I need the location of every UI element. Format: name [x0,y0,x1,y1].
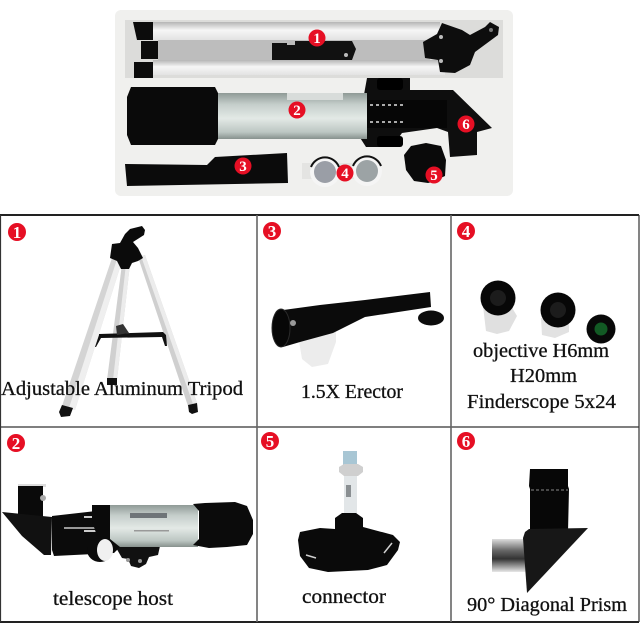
erector illustration [272,292,444,367]
label: eyepiece specs [467,340,616,413]
number badge 4: 4 [462,222,471,241]
label: erector: 1.5X Erector [301,381,403,403]
tray number badges: 1 [313,31,321,47]
erector tube in tray [125,153,288,186]
number badge 1 [8,223,26,242]
number badge 6 [457,432,475,451]
tray number badges: 2 [293,103,301,119]
foam tray base [115,10,513,196]
number badge 3: 3 [268,222,276,241]
panel: connector [261,432,400,608]
number badge 4 [457,222,475,241]
panel: erector [263,222,444,403]
number badge 3 [263,222,281,241]
number badge 1: 1 [13,223,21,242]
eyepieces in tray [302,156,382,187]
prism illustration [492,469,588,593]
tray number badges [234,30,474,184]
panel: diagonal prism [457,432,627,616]
label: eyepiece specs: Finderscope 5x24 [467,391,616,413]
panel: telescope host [2,434,253,610]
folded tripod [133,22,499,78]
label: telescope host: telescope host [53,588,173,610]
telescope illustration [2,484,253,568]
connector knob in tray [404,143,446,183]
table grid [0,215,639,622]
panel: foam tray with all parts [115,10,513,196]
number badge 6: 6 [462,432,470,451]
tray number badges: 6 [462,117,470,133]
tripod recess [125,20,503,78]
eyepieces illustration [480,280,616,344]
label: tripod: Adjustable Aluminum Tripod [1,378,243,400]
tray number badges: 4 [341,166,349,182]
connector illustration [298,451,400,572]
tray number badges: 3 [239,159,247,175]
number badge 5 [261,432,279,451]
panel: eyepieces and finderscope [457,222,616,413]
tray number badges: 5 [430,168,438,184]
number badge 2: 2 [12,434,20,453]
number badge 5: 5 [266,432,274,451]
label: connector: connector [302,586,386,608]
panel: tripod [1,223,243,417]
telescope body in tray [127,78,492,157]
label: eyepiece specs: H20mm [510,365,577,387]
tripod illustration [59,226,198,417]
label: prism: 90° Diagonal Prism [467,594,627,616]
label: eyepiece specs: objective H6mm [473,340,609,362]
number badge 2 [7,434,25,453]
